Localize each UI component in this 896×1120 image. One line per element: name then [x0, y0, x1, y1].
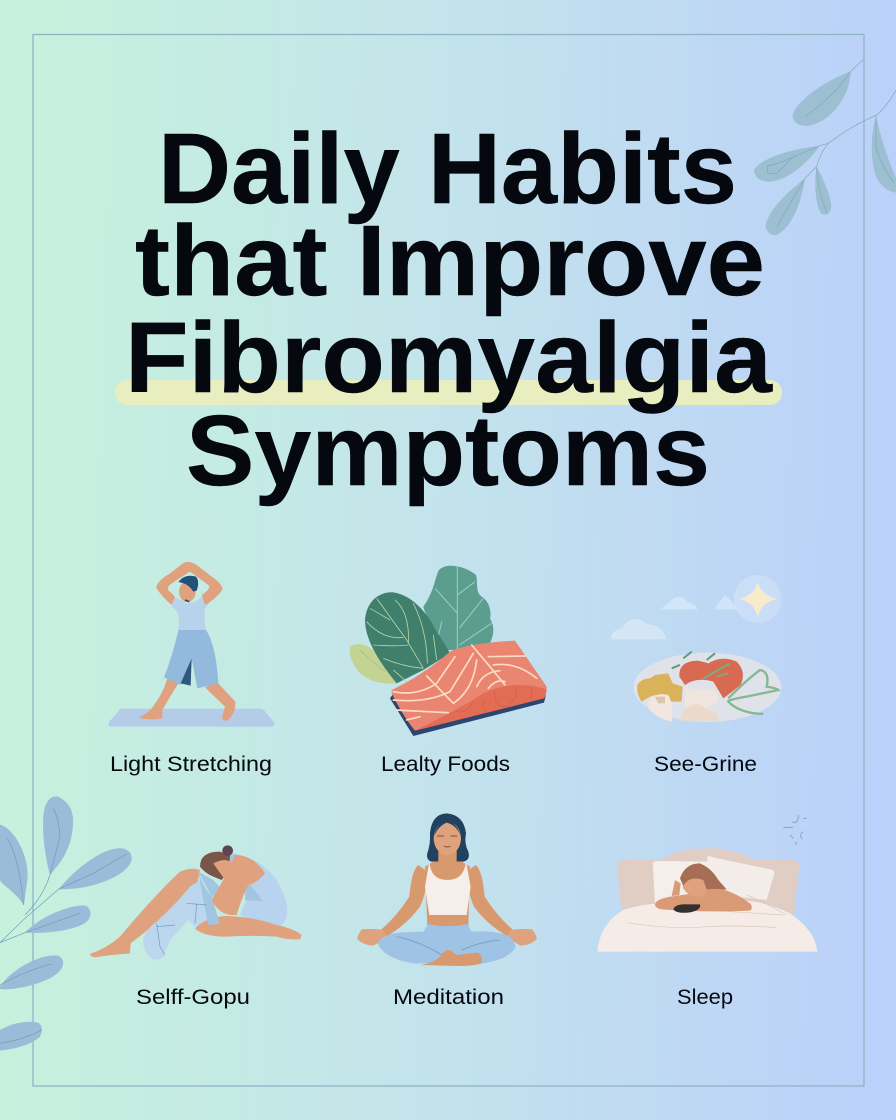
sun — [734, 575, 782, 623]
title: Symptoms — [186, 395, 710, 507]
label: Selff-Gopu: Selff-Gopu — [136, 986, 250, 1009]
title: that Improve — [135, 205, 765, 317]
label: Meditation: Meditation — [393, 986, 504, 1009]
label: See-Grine: See-Grine — [654, 753, 757, 776]
decorative leaves: bottom left — [0, 796, 132, 1051]
illustration: light stretching — [108, 562, 275, 727]
title: Daily Habits — [158, 113, 737, 225]
illustration: salmon and leafy greens — [350, 566, 547, 736]
title highlight — [115, 380, 782, 405]
illustration: sleeping in bed — [597, 815, 817, 952]
decorative leaves: top right — [754, 59, 896, 235]
title: Fibromyalgia — [125, 302, 773, 414]
title — [115, 113, 782, 507]
clouds — [611, 595, 737, 639]
label: Light Stretching: Light Stretching — [110, 753, 272, 776]
illustration: meditation pose — [357, 813, 537, 966]
illustration: plate of food with clouds and sun — [611, 575, 782, 722]
illustration: self-care curled pose — [90, 845, 302, 960]
label: Sleep: Sleep — [677, 986, 733, 1009]
label: Lealty Foods: Lealty Foods — [381, 753, 510, 776]
